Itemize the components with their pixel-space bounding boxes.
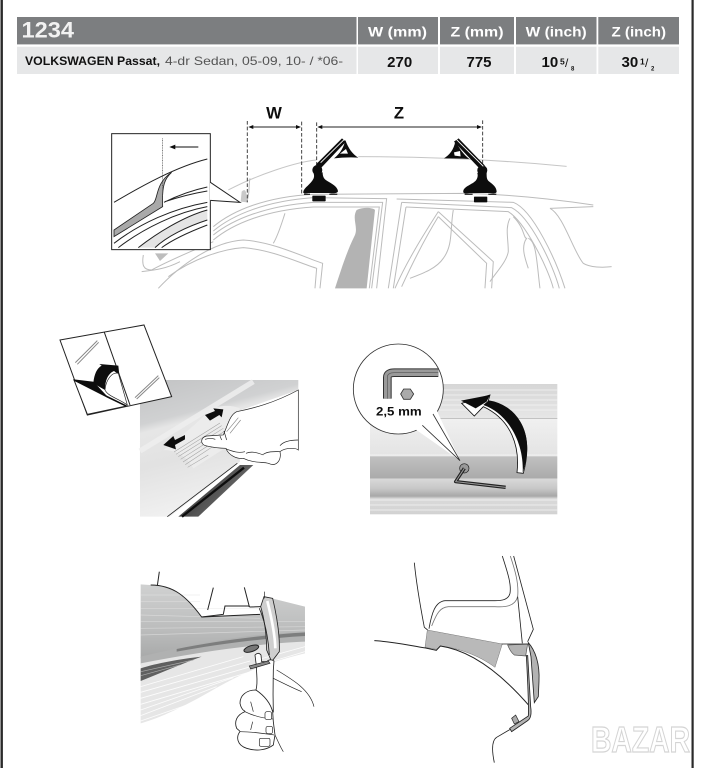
front roof mount foot	[303, 138, 358, 201]
table header row: W (mm)	[368, 24, 427, 40]
table data row: VOLKSWAGEN Passat,	[25, 55, 160, 68]
roof edge outline	[151, 572, 262, 617]
black trim strip	[167, 463, 253, 517]
table data row	[17, 47, 679, 74]
table header row	[17, 17, 679, 44]
step 4: mounted clip cross-section	[374, 556, 539, 763]
slide arrows	[163, 408, 223, 449]
magnified 2,5 mm callout: 2,5 mm	[376, 405, 422, 419]
striped roof panel	[370, 384, 557, 514]
table header row: Z (mm)	[450, 24, 504, 40]
table data row: 30	[622, 54, 638, 71]
curved rotation arrow	[461, 395, 527, 473]
film sticker sheet	[60, 325, 172, 415]
grey seat shape	[335, 208, 375, 288]
spec table	[17, 17, 679, 74]
magnified 2,5 mm callout	[353, 344, 460, 461]
metal bracket	[259, 592, 279, 662]
table data row: 270	[387, 54, 412, 71]
hex key tool	[456, 464, 506, 487]
car roof diagram	[112, 104, 612, 288]
table data row: 8	[571, 66, 575, 72]
step 2: hex key tighten	[353, 344, 557, 514]
table header row: Z (inch)	[612, 24, 666, 40]
table data row: 1	[640, 56, 645, 66]
table data row: 10	[542, 54, 558, 71]
clamp bracket	[493, 643, 539, 763]
step 3: inserting clip at door edge	[141, 572, 314, 752]
table header row: 1234	[22, 18, 75, 43]
dimension markers W and Z	[247, 104, 483, 202]
dimension markers W and Z: W	[266, 104, 282, 123]
roof curve outline	[374, 641, 530, 707]
table data row: 2	[651, 66, 655, 72]
dimension markers W and Z: Z	[394, 104, 404, 123]
door frame profile	[414, 556, 533, 643]
striped car side panel	[141, 584, 305, 723]
table data row: 4-dr Sedan, 05-09, 10- / *06-	[165, 55, 343, 68]
table data row: 5	[560, 56, 565, 66]
gripping hand	[236, 653, 314, 752]
inset detail callout	[112, 134, 240, 250]
table data row: /	[565, 56, 569, 70]
table data row: 775	[466, 54, 492, 71]
table data row: /	[645, 56, 649, 70]
step 1: peel and apply film	[60, 325, 298, 517]
hand smoothing film	[202, 390, 298, 464]
grey seal block	[425, 630, 502, 667]
fixing hole	[243, 643, 260, 654]
car outline	[142, 157, 612, 288]
table header row: W (inch)	[526, 24, 587, 40]
rear roof mount foot	[444, 138, 497, 202]
grey roof panel with patch	[140, 380, 298, 517]
